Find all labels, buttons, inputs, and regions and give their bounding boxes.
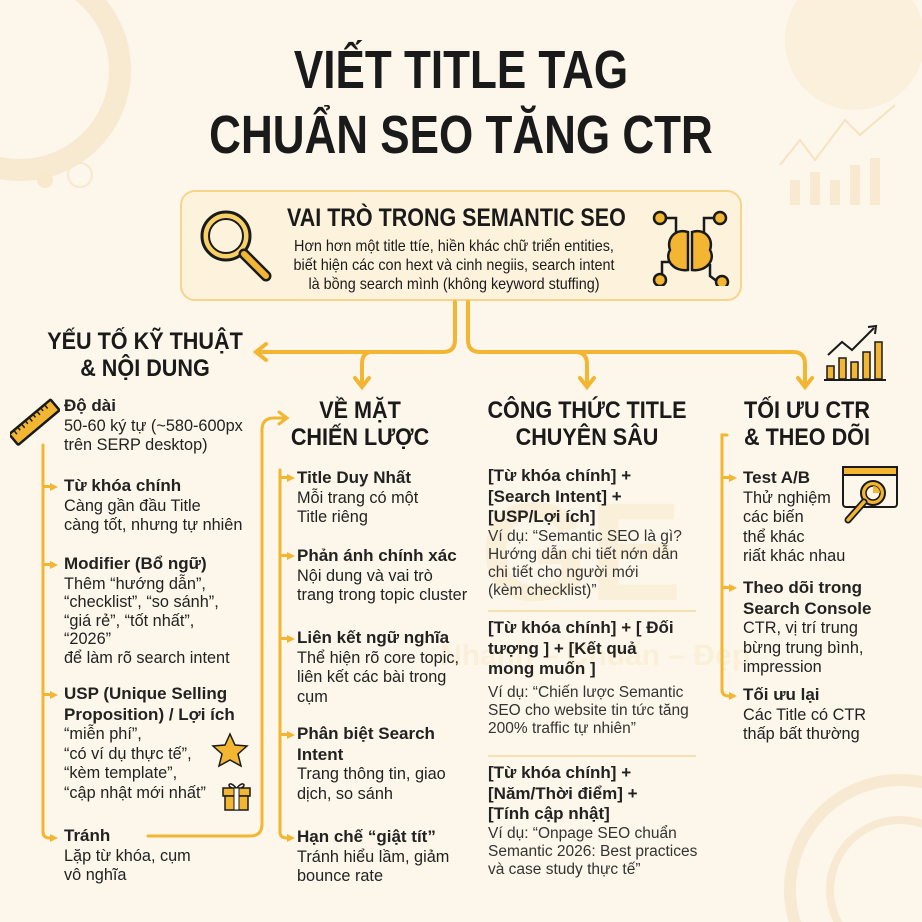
item: tu khoa: càng tốt, nhưng tự nhiên xyxy=(64,516,242,534)
column 3 formulas: [Từ khóa chính] + xyxy=(488,466,631,485)
item: tranh: Lặp từ khóa, cụm xyxy=(64,846,191,864)
item: tu khoa: Càng gần đầu Title xyxy=(64,496,201,514)
item: usp: “có ví dụ thực tế”, xyxy=(64,744,192,762)
icon: star xyxy=(211,732,249,768)
heading: formula xyxy=(487,396,687,451)
item: usp: “kèm template”, xyxy=(64,764,177,782)
item: tranh: Tránh xyxy=(64,826,110,845)
heading: technical: YẾU TỐ KỸ THUẬT xyxy=(47,328,243,355)
column 4 items: thể khác xyxy=(743,528,805,546)
text block xyxy=(294,238,614,293)
column 4 items: CTR, vị trí trung xyxy=(743,619,858,637)
column 2 items xyxy=(297,468,467,885)
column 3 formulas: tượng ] + [Kết quả xyxy=(488,638,637,658)
column 4 items: Thử nghiệm xyxy=(743,488,831,506)
column 2 items: trang trong topic cluster xyxy=(297,586,467,604)
column 4 items: Tối ưu lại xyxy=(743,685,820,704)
item: modifier: “giá rẻ”, “tốt nhất”, xyxy=(64,612,194,630)
column 2 items: Thể hiện rõ core topic, xyxy=(297,648,459,666)
column 4 items xyxy=(743,468,872,743)
item: usp: USP (Unique Selling xyxy=(64,684,227,703)
icon: gift xyxy=(222,783,251,811)
column 2 items: cụm xyxy=(297,688,328,706)
heading: strategy xyxy=(291,396,429,451)
column 3 formulas: [Năm/Thời điểm] + xyxy=(488,784,638,802)
column 4 items: Các Title có CTR xyxy=(743,706,866,724)
column 4 items: thấp bất thường xyxy=(743,725,860,743)
item: modifier: “2026” xyxy=(64,630,111,648)
item: usp xyxy=(64,684,235,802)
column 2 items: Title riêng xyxy=(297,508,368,526)
panel: semantic seo role xyxy=(180,190,742,301)
background decorations: Nhanh – Chuẩn – Đẹp xyxy=(440,639,750,672)
column 3 formulas: (kèm checklist)” xyxy=(488,582,597,599)
item: do dai: trên SERP desktop) xyxy=(64,436,208,454)
column 3 formulas: [Từ khóa chính] + [ Đối xyxy=(488,618,674,637)
column 2 items: bounce rate xyxy=(297,867,383,885)
column 2 items: Nội dung và vai trò xyxy=(297,566,433,584)
background decorations: GE xyxy=(480,473,682,630)
item: tu khoa xyxy=(64,476,242,534)
column 4 items: bừng trung bình, xyxy=(743,638,863,656)
heading: technical: & NỘI DUNG xyxy=(80,355,210,382)
item: modifier: Thêm “hướng dẫn”, xyxy=(64,574,206,592)
column 3 formulas: [Tính cập nhật] xyxy=(488,804,610,823)
column 2 items: Mỗi trang có một xyxy=(297,488,418,506)
item: modifier xyxy=(64,554,230,666)
column 2 items: Tránh hiểu lầm, giảm xyxy=(297,848,449,866)
icon: brain xyxy=(652,210,730,286)
icon: browser analytics xyxy=(842,466,898,524)
heading: VAI TRÒ TRONG SEMANTIC SEO xyxy=(287,204,626,232)
column 3 formulas: 200% traffic tự nhiên” xyxy=(488,720,636,737)
heading: technical xyxy=(47,327,243,382)
column 3 formulas: và case study thực tế” xyxy=(488,861,641,878)
column 4 items: impression xyxy=(743,658,822,676)
title: VIẾT TITLE TAG xyxy=(294,40,628,100)
item: usp: Proposition) / Lợi ích xyxy=(64,704,235,724)
column 3 formulas: chi tiết cho người mới xyxy=(488,564,638,581)
icon: ruler xyxy=(10,398,60,446)
column 3 formulas: [Search Intent] + xyxy=(488,486,622,506)
item: tu khoa: Từ khóa chính xyxy=(64,476,181,495)
column 4 items: Search Console xyxy=(743,598,872,618)
column 3 formulas: Ví dụ: “Chiến lược Semantic xyxy=(488,684,683,700)
item: modifier: để làm rõ search intent xyxy=(64,648,230,666)
text block: biết hiện các con hext và cinh negiis, search intent xyxy=(294,257,614,274)
column 4 items: riất khác nhau xyxy=(743,547,845,565)
heading: strategy: CHIẾN LƯỢC xyxy=(291,424,429,451)
item: tranh xyxy=(64,826,191,884)
column 2 items: Liên kết ngữ nghĩa xyxy=(297,628,449,647)
column 2 items: Phản ánh chính xác xyxy=(297,546,457,565)
column 3 formulas: Hướng dẫn chi tiết nớn dẫn xyxy=(488,546,678,563)
heading: ctr: TỐI ƯU CTR xyxy=(744,397,870,424)
text block: là bồng search mình (không keyword stuffing) xyxy=(308,276,600,293)
heading: formula: CHUYÊN SÂU xyxy=(516,424,658,451)
item: tranh: vô nghĩa xyxy=(64,866,126,884)
icon: growth chart xyxy=(824,324,886,381)
column 3 formulas: [USP/Lợi ích] xyxy=(488,507,595,526)
column 2 items: Intent xyxy=(297,744,343,764)
heading: strategy: VỀ MẶT xyxy=(319,397,401,424)
column 3 formulas xyxy=(488,466,697,878)
column 3 formulas: Ví dụ: “Semantic SEO là gì? xyxy=(488,528,682,544)
item: do dai: Độ dài xyxy=(64,396,116,415)
column 2 items: liên kết các bài trong xyxy=(297,668,446,686)
column 4 items: các biến xyxy=(743,508,804,526)
title: CHUẨN SEO TĂNG CTR xyxy=(209,105,713,165)
column 4 items: Theo dõi trong xyxy=(743,578,862,597)
column 2 items: Trang thông tin, giao xyxy=(297,765,446,783)
heading: ctr: & THEO DÕI xyxy=(744,424,870,451)
column 2 items: Hạn chế “giật tít” xyxy=(297,827,436,846)
column 3 formulas: [Từ khóa chính] + xyxy=(488,763,631,782)
column 3 formulas: Ví dụ: “Onpage SEO chuẩn xyxy=(488,824,677,842)
title xyxy=(209,40,713,165)
column 3 formulas: SEO cho website tin tức tăng xyxy=(488,702,689,719)
column 4 items: Test A/B xyxy=(743,468,810,487)
heading: formula: CÔNG THỨC TITLE xyxy=(487,397,687,424)
item: modifier: Modifier (Bổ ngữ) xyxy=(64,554,207,573)
column 2 items: Title Duy Nhất xyxy=(297,468,411,487)
heading: ctr xyxy=(744,396,870,451)
column 2 items: dịch, so sánh xyxy=(297,784,393,802)
column 2 items: Phân biệt Search xyxy=(297,724,435,743)
item: usp: “miễn phí”, xyxy=(64,725,142,743)
column 3 formulas: Semantic 2026: Best practices xyxy=(488,843,697,860)
text block: Hơn hơn một title ttíe, hiền khác chữ triển entities, xyxy=(294,238,614,255)
icon: magnifier xyxy=(200,210,272,282)
item: usp: “cập nhật mới nhất” xyxy=(64,784,206,802)
column 1 items xyxy=(64,396,243,884)
item: modifier: “checklist”, “so sánh”, xyxy=(64,593,219,611)
item: do dai xyxy=(64,396,243,454)
item: do dai: 50-60 ký tự (~580-600px xyxy=(64,416,243,434)
column 3 formulas: mong muốn ] xyxy=(488,659,596,678)
